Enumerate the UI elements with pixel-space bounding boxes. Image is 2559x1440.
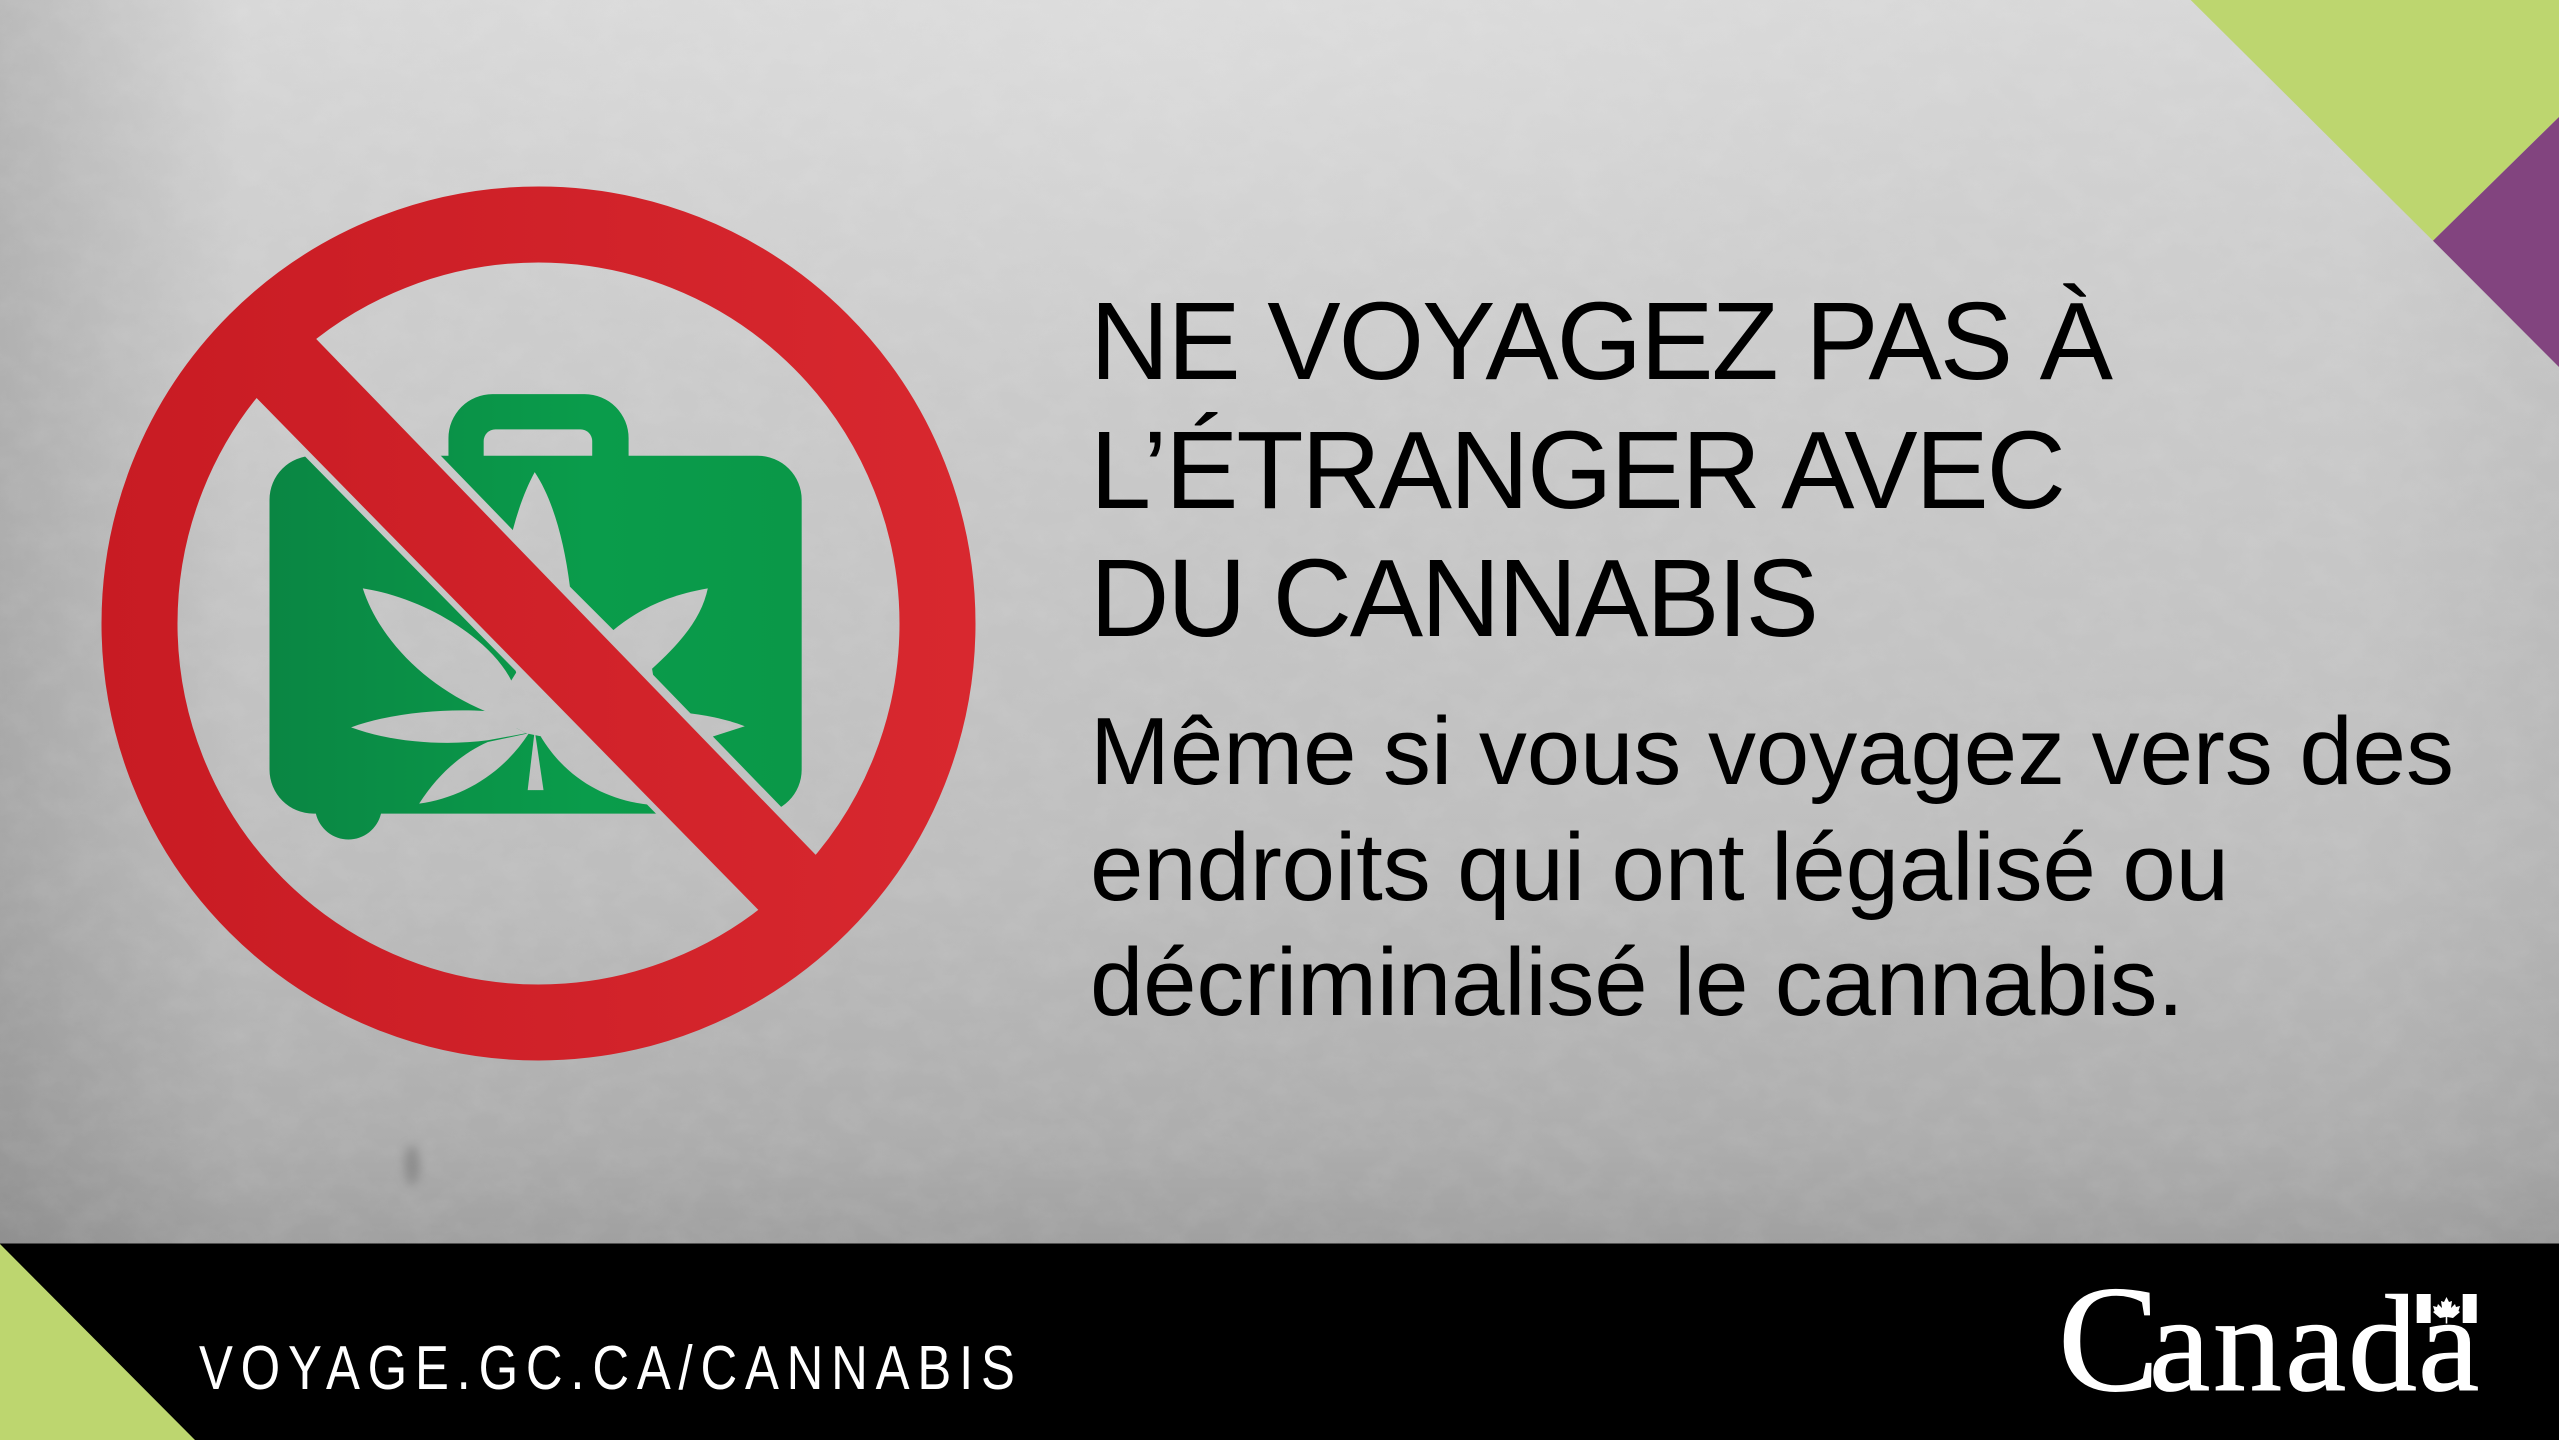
body text: endroits qui ont légalisé ou <box>1090 814 2229 921</box>
body text <box>1090 698 2454 1036</box>
icon: green suitcase with cannabis leaf <box>270 394 802 839</box>
Canada wordmark: anada <box>2149 1267 2479 1420</box>
heading <box>1090 280 2114 660</box>
icon: red prohibition ring <box>140 224 938 1022</box>
background smudge <box>404 1145 420 1185</box>
body text: Même si vous voyagez vers des <box>1090 698 2454 805</box>
body text: décriminalisé le cannabis. <box>1090 929 2184 1036</box>
corner: green triangle top right <box>2191 0 2559 241</box>
flag symbol <box>2417 1294 2477 1324</box>
Canada wordmark: C <box>2058 1255 2159 1423</box>
corner: purple triangle right <box>2433 117 2559 367</box>
footer url: VOYAGE.GC.CA/CANNABIS <box>199 1334 1015 1403</box>
heading: DU CANNABIS <box>1090 537 1819 660</box>
icon: red diagonal bar <box>233 315 840 933</box>
footer bar <box>0 1244 2559 1440</box>
icon: no cannabis suitcase prohibition sign <box>140 224 938 1022</box>
footer green triangle <box>0 1244 195 1440</box>
heading: NE VOYAGEZ PAS À <box>1090 280 2114 403</box>
heading: L’ÉTRANGER AVEC <box>1090 409 2066 532</box>
